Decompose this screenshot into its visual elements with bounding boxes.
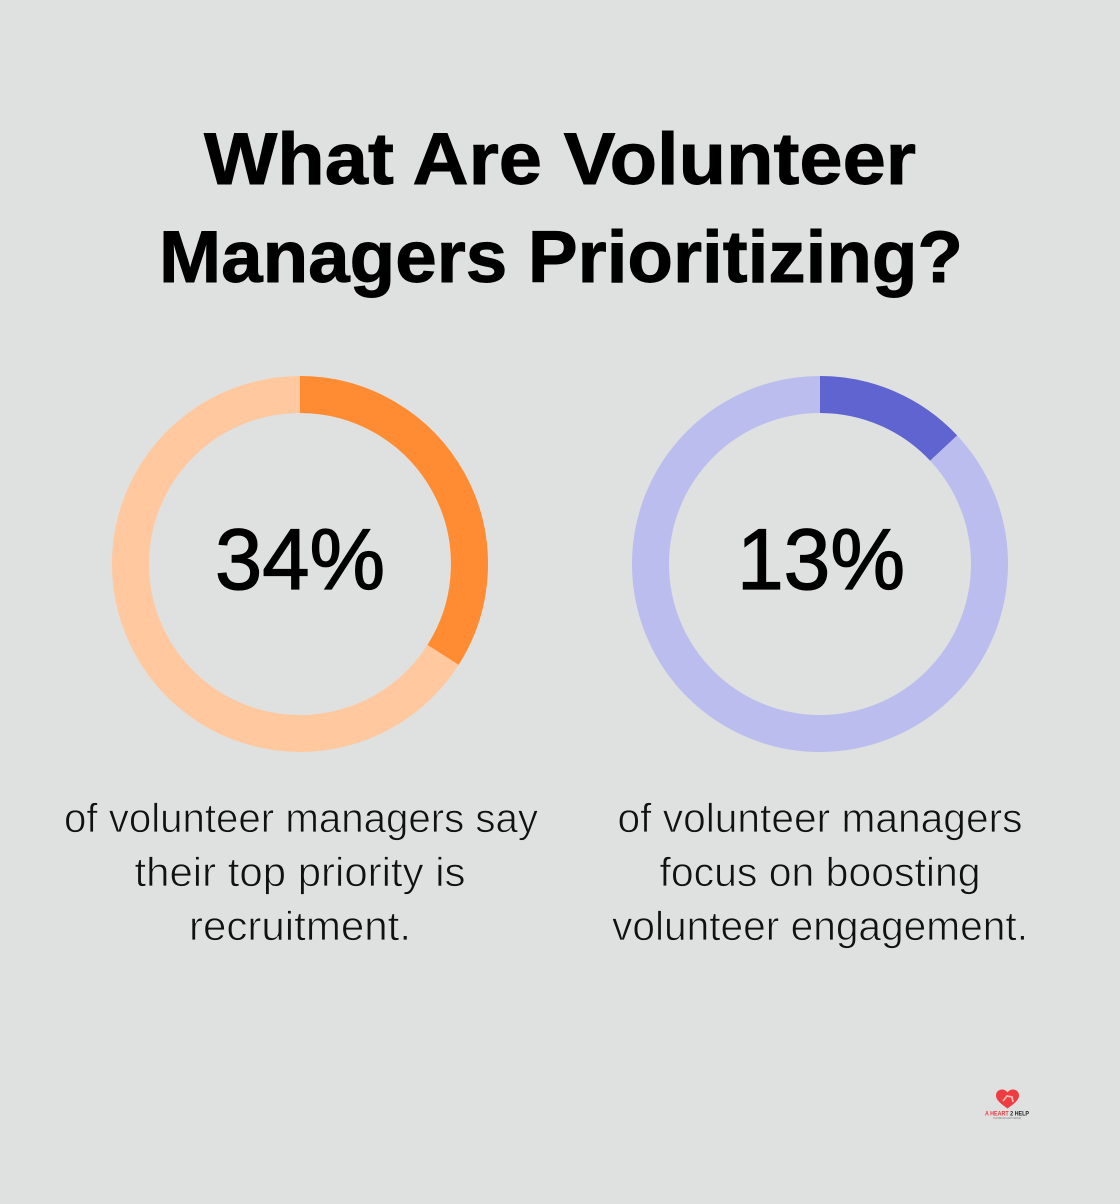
logo tagline: VOLUNTEER AND CHARITY SERVICES (993, 1116, 1021, 1120)
description: engagement (612, 795, 1028, 949)
logo: A Heart 2 Help (985, 1090, 1030, 1120)
description: recruitment: of volunteer managers say (64, 795, 538, 841)
icon: heart with hands (996, 1090, 1019, 1108)
donut chart: 34% (130, 394, 470, 734)
title: What Are Volunteer (204, 119, 916, 200)
value: 34%: 34% (215, 512, 385, 608)
description: recruitment (64, 795, 538, 949)
title (159, 119, 963, 298)
description: engagement: focus on boosting (660, 849, 980, 895)
panel: recruitment statistic (64, 394, 538, 949)
value: 13%: 13% (737, 512, 905, 608)
panel: engagement statistic (612, 394, 1028, 949)
description: recruitment: their top priority is (134, 849, 466, 895)
logo wordmark: A HEART 2 HELP (985, 1110, 1030, 1118)
donut chart: 13% (650, 394, 990, 734)
description: engagement: volunteer engagement. (612, 903, 1028, 949)
title: Managers Prioritizing? (159, 217, 963, 298)
description: recruitment: recruitment. (189, 903, 411, 949)
description: engagement: of volunteer managers (618, 795, 1022, 841)
